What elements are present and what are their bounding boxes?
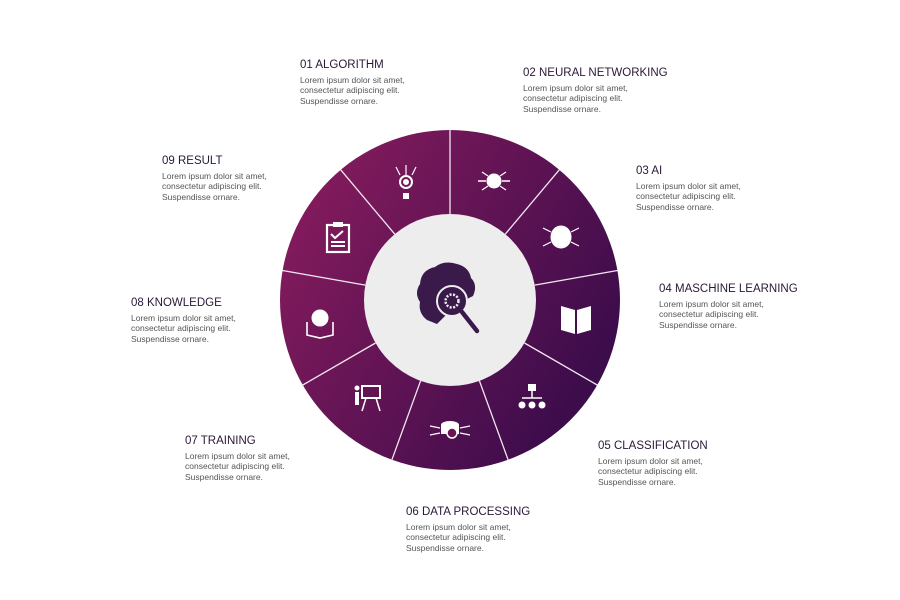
text: 08 knowledge: consectetur adipiscing elit. xyxy=(131,323,231,333)
text: 07 training: 07 TRAINING xyxy=(185,435,256,447)
text: 03 ai: Suspendisse ornare. xyxy=(636,202,714,212)
text: 06 data processing: Suspendisse ornare. xyxy=(406,543,484,553)
text: 05 classification: Lorem ipsum dolor sit amet, xyxy=(598,456,703,466)
ring xyxy=(280,130,620,470)
text: 04 maschine learning: 04 MASCHINE LEARNING xyxy=(659,283,798,295)
text: 09 result: Suspendisse ornare. xyxy=(162,192,240,202)
text: 04 maschine learning: Lorem ipsum dolor sit amet, xyxy=(659,299,764,309)
text: 03 ai: consectetur adipiscing elit. xyxy=(636,191,736,201)
text: 01 algorithm: Lorem ipsum dolor sit amet, xyxy=(300,75,405,85)
text: 02 neural networking: 02 NEURAL NETWORKING xyxy=(523,67,668,79)
center circle xyxy=(364,214,536,386)
text: 06 data processing: consectetur adipiscing elit. xyxy=(406,532,506,542)
text: 05 classification xyxy=(598,440,708,487)
text: 02 neural networking: Lorem ipsum dolor sit amet, xyxy=(523,83,628,93)
text: 09 result: consectetur adipiscing elit. xyxy=(162,181,262,191)
text: 07 training xyxy=(185,435,290,482)
text: 05 classification: consectetur adipiscing elit. xyxy=(598,466,698,476)
icon: result clipboard xyxy=(327,222,349,252)
text: 01 algorithm: Suspendisse ornare. xyxy=(300,96,378,106)
text: 03 ai: Lorem ipsum dolor sit amet, xyxy=(636,181,741,191)
text: 09 result xyxy=(162,155,267,202)
icon: classification tree xyxy=(518,384,546,408)
text: 06 data processing xyxy=(406,506,530,553)
text: 09 result: Lorem ipsum dolor sit amet, xyxy=(162,171,267,181)
icon: algorithm xyxy=(396,165,416,199)
text: 06 data processing: 06 DATA PROCESSING xyxy=(406,506,530,518)
text: 08 knowledge: Lorem ipsum dolor sit amet, xyxy=(131,313,236,323)
text: 08 knowledge xyxy=(131,297,236,344)
icon: knowledge xyxy=(307,310,333,338)
icon: machine learning book xyxy=(561,306,591,334)
text: 07 training: Suspendisse ornare. xyxy=(185,472,263,482)
icon: data processing xyxy=(430,421,470,438)
text: 08 knowledge: 08 KNOWLEDGE xyxy=(131,297,222,309)
text: 04 maschine learning xyxy=(659,283,798,330)
text: 06 data processing: Lorem ipsum dolor sit amet, xyxy=(406,522,511,532)
text: 07 training: consectetur adipiscing elit. xyxy=(185,461,285,471)
text: 02 neural networking: consectetur adipiscing elit. xyxy=(523,93,623,103)
text: 05 classification: 05 CLASSIFICATION xyxy=(598,440,708,452)
text: 08 knowledge: Suspendisse ornare. xyxy=(131,334,209,344)
text: 09 result: 09 RESULT xyxy=(162,155,223,167)
icon: center brain search xyxy=(417,263,477,331)
text: 04 maschine learning: consectetur adipiscing elit. xyxy=(659,309,759,319)
text: 02 neural networking xyxy=(523,67,668,114)
text: 07 training: Lorem ipsum dolor sit amet, xyxy=(185,451,290,461)
text: 02 neural networking: Suspendisse ornare. xyxy=(523,104,601,114)
icon: AI brain xyxy=(543,226,579,248)
text: 05 classification: Suspendisse ornare. xyxy=(598,477,676,487)
text: 03 ai xyxy=(636,165,741,212)
text: 01 algorithm: 01 ALGORITHM xyxy=(300,59,384,71)
text: 01 algorithm: consectetur adipiscing elit. xyxy=(300,85,400,95)
text: 03 ai: 03 AI xyxy=(636,165,662,177)
icon: training xyxy=(354,386,380,411)
text: 01 algorithm xyxy=(300,59,405,106)
text: 04 maschine learning: Suspendisse ornare. xyxy=(659,320,737,330)
icon: neural networking xyxy=(478,172,510,190)
